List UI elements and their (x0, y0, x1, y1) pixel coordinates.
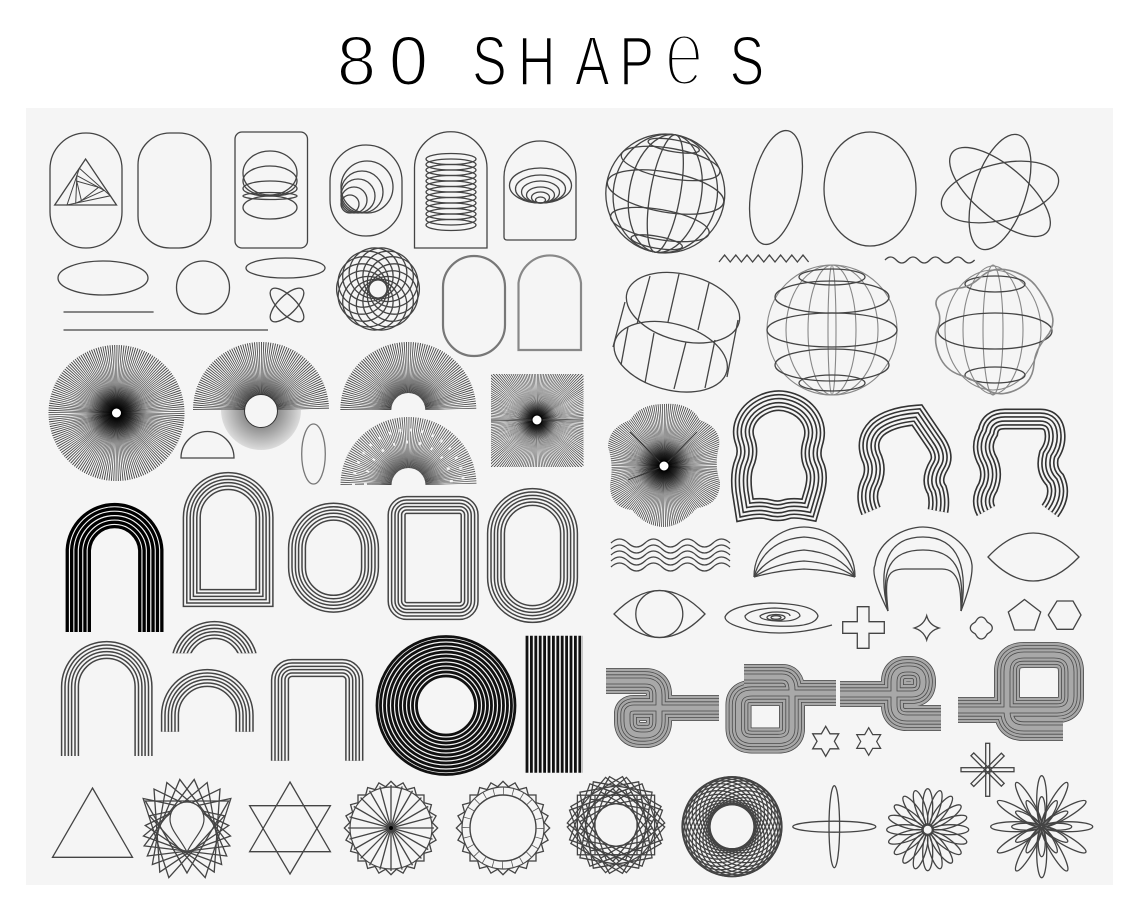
title: H (518, 22, 555, 101)
vertical stripes block (526, 636, 583, 773)
wavy line (885, 257, 975, 263)
squared striped arch (280, 668, 354, 761)
rounded rectangle with stacked ellipses (235, 132, 308, 248)
line ribbon two (738, 677, 836, 740)
leaf shape (988, 533, 1079, 581)
title: 80 (337, 22, 428, 100)
double line capsule (443, 256, 505, 356)
flower with long petals (991, 776, 1093, 878)
zigzag line (719, 255, 809, 262)
capsule with tangent circles (330, 145, 402, 236)
tilted wireframe globe (596, 125, 734, 262)
wavy radial disc (608, 404, 720, 527)
concentric short capsule (297, 512, 370, 604)
oval (824, 132, 916, 246)
line ribbon three (840, 669, 941, 718)
two horizontal lines (64, 312, 268, 330)
layered helmet dome (874, 527, 972, 611)
spirograph of circles (330, 241, 426, 337)
layered dome (754, 527, 855, 577)
hexagon (1048, 601, 1081, 629)
radial half disc upper (340, 342, 476, 410)
distorted wireframe blob (936, 265, 1053, 395)
radial half disc lower with speckles (340, 417, 476, 485)
four point star (914, 616, 939, 640)
title: P (619, 22, 654, 101)
crossed thin ellipses (793, 786, 876, 868)
crossed ellipses (265, 283, 309, 327)
wavy arch two (983, 419, 1058, 511)
line ribbon four (958, 655, 1071, 728)
concentric arch frame (192, 481, 264, 598)
stack of wavy lines (611, 539, 730, 571)
concentric rounded rectangle (397, 505, 470, 611)
wireframe cylinder (606, 261, 748, 404)
wireframe globe (767, 265, 897, 395)
circle (176, 261, 230, 314)
capsule with spiral triangle (50, 133, 122, 248)
quatrefoil (970, 617, 992, 639)
flower with twenty petals (887, 789, 969, 871)
spoked wheel (344, 781, 438, 875)
spirograph of squares (567, 777, 665, 873)
short striped arch (170, 678, 245, 732)
open striped arch (70, 650, 144, 756)
wavy arch one (868, 415, 941, 511)
title: e (665, 0, 704, 105)
atom of three ellipses (935, 127, 1065, 257)
six pointed star (250, 782, 330, 874)
narrow ellipse (302, 424, 325, 484)
ellipse (58, 261, 148, 295)
small hexagram (813, 726, 839, 756)
wavy concentric frame (741, 401, 816, 511)
line ribbon one (606, 681, 719, 735)
radial half disc with hole and lower grey half (193, 342, 329, 450)
empty capsule (138, 133, 211, 248)
concentric black ring (377, 636, 515, 774)
title: S (730, 22, 764, 101)
flat ellipse (246, 258, 325, 278)
title: S (472, 22, 507, 101)
small hexagram two (857, 728, 881, 755)
concentric tall capsule (496, 497, 569, 614)
arch with nested bowl ellipses (504, 141, 576, 240)
tilted ellipse (740, 126, 812, 249)
dense spirograph ring (671, 765, 793, 888)
thick black arch (78, 516, 151, 632)
pentagon (1008, 600, 1041, 630)
flat spiral (725, 603, 832, 633)
radial line disc (48, 345, 184, 481)
arch with coil of ellipses (414, 132, 487, 248)
ring with cells (456, 781, 550, 875)
eye (614, 590, 705, 638)
eight arm asterisk (961, 743, 1014, 796)
title (337, 0, 764, 105)
small striped dome (180, 630, 249, 664)
triangle (52, 788, 132, 857)
spirograph of triangles with teardrop hole (115, 766, 259, 878)
small half dome (181, 432, 234, 458)
radial line square (491, 374, 583, 466)
plus outline (843, 607, 884, 648)
double line arch (518, 255, 581, 350)
title: A (575, 22, 610, 101)
